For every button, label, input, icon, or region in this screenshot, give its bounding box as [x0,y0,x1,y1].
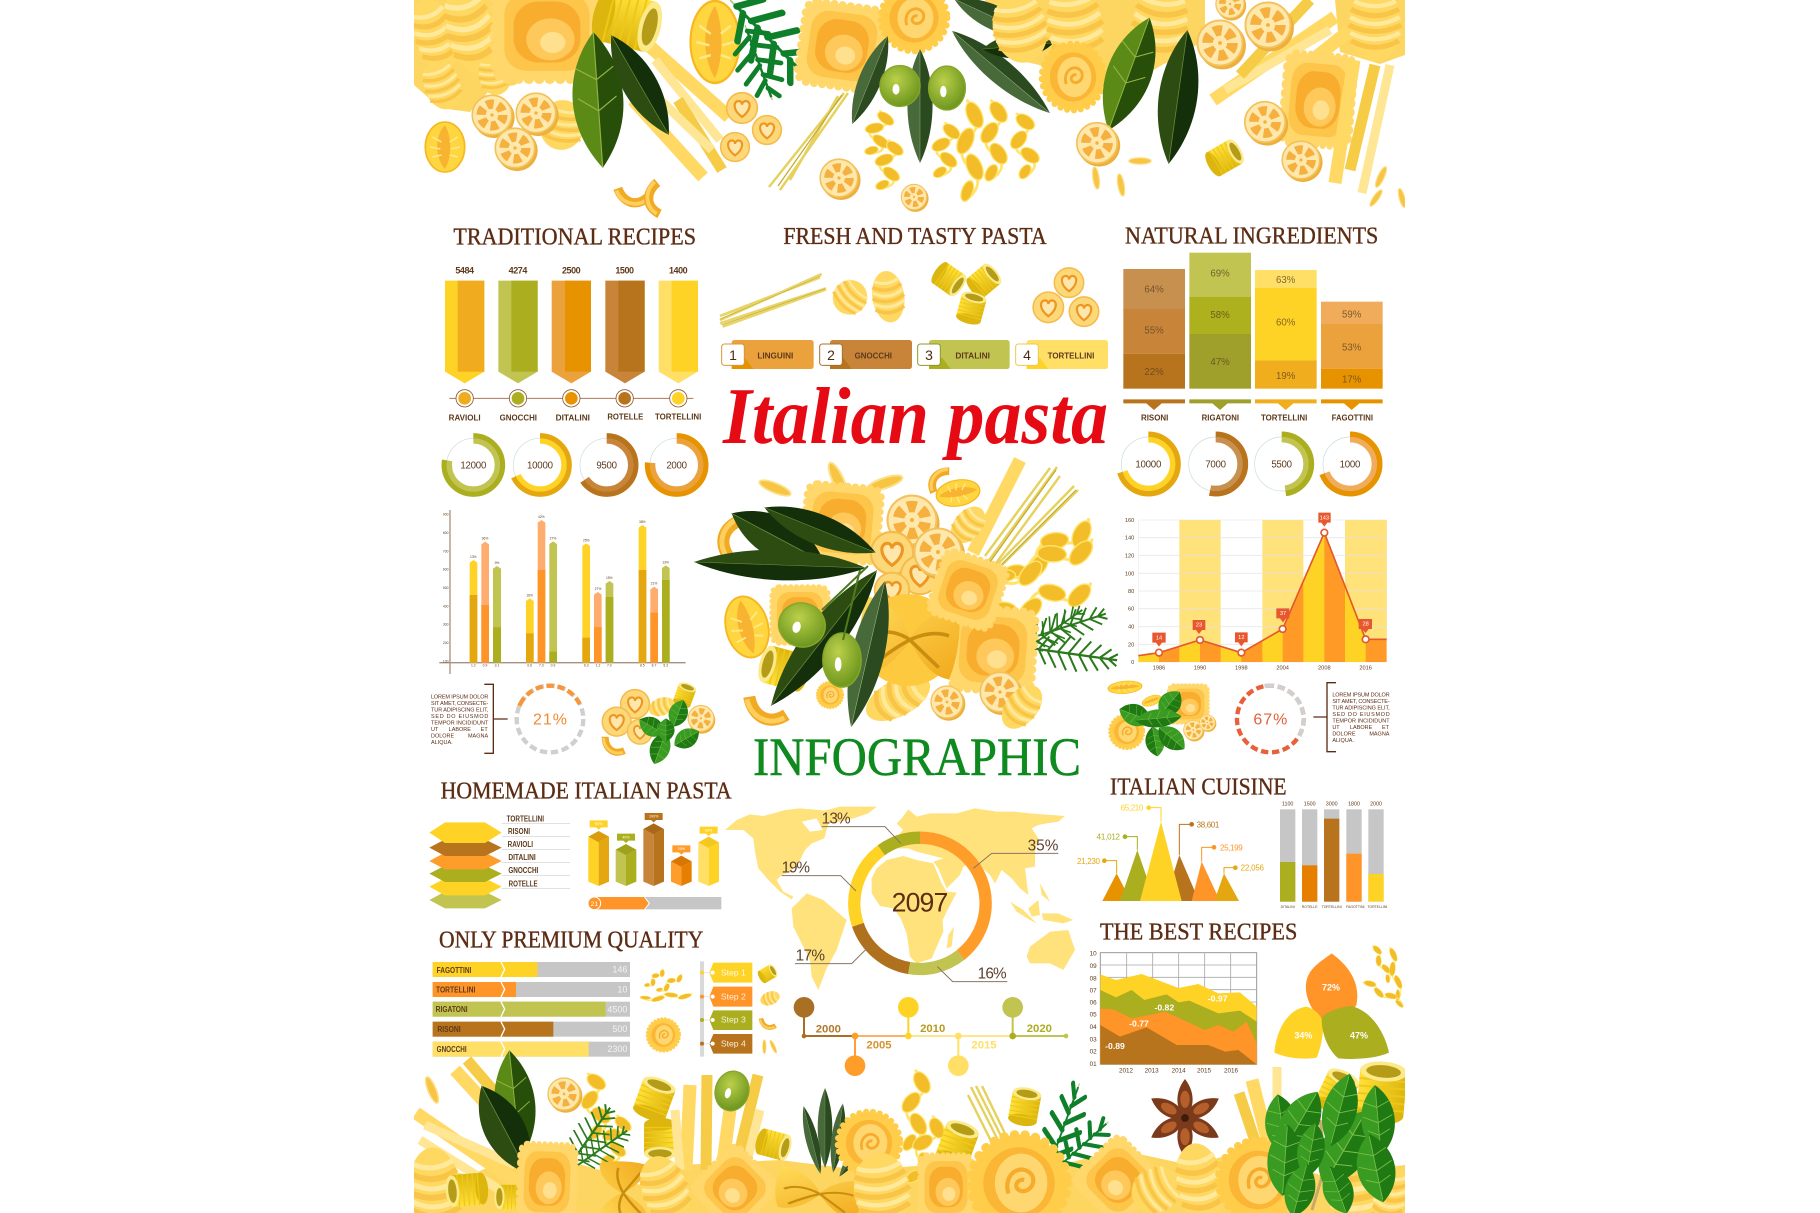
panel: homemade italian pasta and premium quality [429,778,782,1057]
dashed gauge 21%: 21% [533,712,567,729]
layer labels: RAVIOLI [508,840,533,849]
note text: ET [1382,725,1390,731]
bar chart: 9% [495,561,499,565]
note text: SED DO EIUSMOD [431,714,488,720]
heading: homemade italian pasta: HOMEMADE ITALIAN PASTA [441,778,732,804]
note text: TEMPOR INCIDIDUNT [431,720,489,726]
progress rows [433,962,630,1057]
pointers with names: FAGOTTINI [1332,413,1373,423]
timeline dots with names: RAVIOLI [449,412,481,422]
bar chart: 16% [526,593,533,597]
stacked area chart [1090,951,1257,1075]
donut gauges [1119,434,1380,494]
note text: LOREM IPSUM DOLOR [1332,692,1390,698]
numbered tabs: 4 [1023,347,1031,363]
pointers with names [1123,399,1383,423]
bar chart: 15% [606,576,613,580]
stacked area chart: 08 [1090,975,1097,982]
stacked bars: DITALINI [1281,905,1295,909]
stacked columns: 22% [1144,367,1164,378]
donut gauges [444,436,706,494]
heading: traditional recipes: TRADITIONAL RECIPES [453,224,696,250]
note text: MAGNA [1369,731,1390,737]
area line chart: 120 [1125,553,1134,559]
layer labels: ROTELLE [509,880,538,889]
donut total: 2097 [892,888,948,918]
area line chart: 2016 [1359,666,1372,672]
timeline dots with names: ROTELLE [607,412,644,422]
bar chart: 700 [443,549,449,553]
dashed gauge 67% [1234,682,1307,756]
donut gauges: 7000 [1205,460,1226,471]
bar chart: 8.5 [640,664,645,668]
numbered tabs: 1 [729,347,737,363]
arrow banners: 1500 [615,265,634,275]
panel: traditional recipes [444,224,706,494]
3D bars: 20% [678,847,686,851]
numbered tabs: GNOCCHI [855,351,892,361]
arrow banners [445,265,698,383]
progress bar [588,897,721,910]
infographic poster [414,0,1405,1213]
progress rows: 4500 [607,1004,627,1014]
area line chart: 28 [1363,622,1369,628]
arrow banners: 2500 [562,265,581,275]
note text [1332,692,1390,744]
stacked columns: 60% [1276,318,1296,329]
stacked area chart: 03 [1090,1036,1097,1043]
progress rows: 2300 [607,1044,627,1054]
stacked area chart: -0.97 [1208,993,1228,1003]
bar chart: 36% [482,537,488,541]
note text: TUR ADIPISCING ELIT, [431,707,489,713]
bar chart: 900 [443,513,449,517]
donut gauges: 1000 [1340,460,1360,471]
note text: ALIQUA. [431,740,453,746]
stacked columns [1123,253,1383,389]
pasta icons row [720,260,1099,327]
dashed gauge 21% [505,674,595,764]
bar chart: 5.3 [663,664,668,668]
steps: Step 3 [721,1015,746,1025]
panel: natural ingredients [1119,223,1383,494]
center pasta bouquet illustration [694,460,1120,736]
note text: UT [431,727,439,733]
progress rows: FAGOTTINI [437,966,471,975]
area line chart: 20 [1128,642,1134,648]
note text: DOLORE [431,733,455,739]
donut gauges: 2000 [666,460,687,471]
mountain chart [1077,803,1265,901]
mountain chart: 22,056 [1241,863,1265,872]
bar chart: 42% [538,515,545,519]
layer labels: DITALINI [508,853,536,862]
mountain chart: 38,601 [1197,820,1220,829]
stacked area chart: 09 [1090,963,1097,970]
timeline dots with names: GNOCCHI [500,412,537,422]
progress rows: RISONI [437,1025,461,1034]
donut callouts: 35% [1028,838,1059,855]
pasta with mint illustration [602,681,719,767]
numbered tabs: TORTELLINI [1048,351,1094,361]
stacked bars: TORTELLINI [1322,905,1342,909]
area line chart: 100 [1125,571,1134,577]
stacked bars: 2000 [1370,802,1382,808]
bar chart: 1.2 [471,664,476,668]
note text: ET [481,727,488,733]
bar chart: 21% [651,582,657,586]
area line chart: 40 [1128,625,1134,631]
pointers with names: RISONI [1141,413,1168,423]
donut gauges: 5500 [1271,460,1292,471]
stacked area chart: 07 [1090,987,1097,994]
mountain chart: 21,230 [1077,857,1101,866]
fusilli and tortellini illustration [639,965,693,1051]
area line chart: 60 [1128,607,1134,613]
stacked bars [1280,802,1387,909]
bar chart: 400 [443,604,449,608]
panel: world map donut and timeline [725,807,1075,1076]
3D bars: 60% [705,828,713,832]
stacked columns: 55% [1144,326,1164,337]
stacked columns: 47% [1210,357,1230,368]
progress bar: 21 [591,901,598,908]
decorative pasta border: top [404,0,1407,215]
area line chart: 12 [1238,635,1244,641]
numbered tabs: 2 [827,347,835,363]
heading: natural ingredients: NATURAL INGREDIENTS [1125,223,1378,249]
donut chart 2097 [828,811,1012,996]
note text: DOLORE [1332,731,1356,737]
title: Italian pasta: Italian pasta [722,373,1108,461]
area line chart: 14 [1156,635,1162,641]
stacked bars: 1800 [1348,802,1360,808]
layer labels: TORTELLINI [507,815,544,824]
3D bars [588,813,719,886]
bar chart: 6.3 [584,664,589,668]
bar chart: 13% [470,555,477,559]
stacked bars: 1500 [1304,802,1316,808]
steps [700,961,752,1057]
stacked area chart: 05 [1090,1012,1097,1019]
petal chart [1274,953,1389,1059]
stacked columns: 69% [1210,269,1230,280]
bar chart: 200 [443,641,449,645]
arrow banners: 1400 [669,265,688,275]
fusilli sprig illustration [1360,942,1408,1011]
stacked area chart: 06 [1090,1000,1097,1007]
area line chart: 37 [1280,611,1286,617]
bar chart: 7.0 [607,664,612,668]
arrow banners: 4274 [509,265,527,275]
bar chart: 7.3 [539,664,544,668]
bar chart: 27% [595,587,601,591]
numbered tabs: LINGUINI [757,351,793,361]
note text: SIT AMET, CONSECTE- [1332,699,1390,705]
bar chart: 300 [443,623,449,627]
area line chart: 80 [1128,589,1134,595]
mountain chart: 41,012 [1097,832,1121,841]
pointers with names: TORTELLINI [1261,413,1307,423]
timeline: 2005 [866,1039,892,1051]
bar chart: 600 [443,568,449,572]
pasta with basil illustration [1108,680,1216,758]
stacked columns: 64% [1144,285,1164,296]
donut gauges: 9500 [596,460,617,471]
donut gauges: 10000 [527,460,553,471]
progress rows: 500 [612,1024,627,1034]
bar chart: 8.7 [652,664,656,668]
stacked bars: 3000 [1326,802,1338,808]
bracket [484,684,508,753]
stacked bars: FAGOTTINI [1346,905,1365,909]
stacked area chart: 2012 [1119,1068,1134,1075]
world map [725,807,1075,990]
bar chart: 3.1 [495,664,499,668]
numbered tabs: 3 [925,347,933,363]
donut callouts: 17% [796,947,825,964]
area line chart: 2008 [1318,666,1331,672]
petal chart: 72% [1322,983,1340,993]
stacked columns: 63% [1276,275,1296,286]
note text [431,694,489,746]
area line chart: 160 [1125,518,1134,524]
stacked bars: 1100 [1282,802,1293,808]
steps: Step 1 [721,967,746,977]
note text: TEMPOR INCIDIDUNT [1332,718,1390,724]
donut gauges: 10000 [1135,460,1161,471]
petal chart: 47% [1350,1031,1368,1041]
timeline: 2000 [816,1024,841,1036]
area line chart: 1986 [1153,666,1165,672]
area line chart: 143 [1320,515,1329,521]
stacked area chart: 2014 [1172,1068,1186,1075]
area line chart: 23 [1196,623,1202,629]
stacked area chart: 01 [1090,1061,1097,1068]
bar chart: 800 [443,531,449,535]
note text: UT [1332,725,1340,731]
stacked area chart: -0.89 [1105,1041,1125,1051]
area line chart: 2004 [1276,666,1289,672]
steps: Step 2 [721,991,746,1001]
stacked area chart: 04 [1090,1024,1097,1031]
timeline [794,997,1068,1076]
donut callouts [782,810,1059,983]
panel: fresh and tasty pasta [720,224,1108,369]
timeline: 2020 [1027,1023,1052,1035]
note text: LABORE [449,727,471,733]
stacked columns: 59% [1342,309,1362,320]
note text: SED DO EIUSMOD [1332,712,1390,718]
area line chart: 1998 [1235,666,1248,672]
donut callouts: 13% [822,810,851,827]
bracket [1313,683,1336,752]
progress rows: 146 [612,964,627,974]
timeline dots with names: TORTELLINI [655,412,701,422]
steps: Step 4 [721,1038,746,1048]
area line chart: 1990 [1194,666,1206,672]
bar chart: 27% [550,536,556,540]
note text: SIT AMET, CONSECTE- [431,701,489,707]
stacked area chart: 2015 [1197,1068,1212,1075]
heading: italian cuisine: ITALIAN CUISINE [1110,774,1287,800]
bar chart: 1.2 [596,664,600,668]
progress rows: TORTELLINI [436,985,475,994]
stacked area chart: 2013 [1145,1068,1159,1075]
bar chart: 0.6 [527,664,532,668]
donut callouts: 19% [782,859,810,876]
note text: MAGNA [468,733,488,739]
area line chart: 140 [1125,536,1134,542]
stacked columns: 58% [1210,310,1230,321]
numbered tabs [722,340,1108,369]
bar chart: 0.9 [483,664,487,668]
area line chart: 0 [1131,660,1134,666]
progress rows: GNOCCHI [437,1045,467,1054]
panel: italian cuisine and best recipes [1077,774,1408,1075]
decorative pasta border: bottom [406,1048,1411,1213]
bar chart: 100 [443,659,449,663]
timeline: 2010 [920,1023,945,1035]
numbered tabs: DITALINI [955,351,990,361]
bar chart [439,510,686,674]
panel: grouped bar chart with note [431,510,719,767]
timeline dots with names [449,390,701,422]
stacked area chart: -0.77 [1129,1018,1149,1028]
stacked bars: ROTELLE [1302,905,1318,909]
layer labels: RISONI [508,827,530,836]
stacked area chart: 10 [1090,951,1097,958]
panel: line chart with note [1108,513,1390,758]
timeline: 2015 [971,1039,997,1051]
stacked columns: 53% [1342,342,1362,353]
bar chart: 500 [443,586,449,590]
area line chart [1125,513,1387,672]
stacked bars: TORTELLINI [1367,905,1387,909]
heading: the best recipes: THE BEST RECIPES [1100,919,1297,945]
layer labels [502,815,570,889]
step icons [756,963,782,1054]
stacked columns: 17% [1342,375,1362,386]
stacked area chart: 2016 [1224,1068,1239,1075]
mountain chart: 25,199 [1220,843,1243,852]
heading: only premium quality: ONLY PREMIUM QUALITY [439,927,703,953]
note text: LABORE [1350,725,1373,731]
progress rows: 10 [617,984,627,994]
bar chart: 0.9 [551,664,555,668]
stacked area chart: -0.82 [1154,1002,1174,1012]
heading: fresh and tasty pasta: FRESH AND TASTY PASTA [783,224,1047,250]
stacked hexagon layers [429,822,502,908]
subtitle: infographic: INFOGRAPHIC [753,727,1081,787]
mountain chart: 65,210 [1121,803,1144,812]
stacked area chart: 02 [1090,1049,1097,1056]
bar chart: 13% [662,560,669,564]
petal chart: 34% [1294,1031,1312,1041]
arrow banners: 5484 [455,265,474,275]
note text: TUR ADIPISCING ELIT, [1332,705,1390,711]
3D bars: 100% [649,815,659,819]
donut callouts: 16% [978,966,1007,983]
progress rows: RIGATONI [436,1005,468,1014]
note text: ALIQUA. [1332,738,1354,744]
layer labels: GNOCCHI [508,866,538,875]
3D bars: 40% [622,835,630,839]
donut gauges: 12000 [460,460,486,471]
bar chart: 38% [639,520,646,524]
dashed gauge 67%: 67% [1253,712,1287,729]
timeline dots with names: DITALINI [556,412,590,422]
note text: LOREM IPSUM DOLOR [431,694,488,700]
bar chart: 25% [583,538,590,542]
pointers with names: RIGATONI [1202,413,1239,423]
3D bars: 90% [595,822,603,826]
stacked columns: 19% [1276,371,1296,382]
